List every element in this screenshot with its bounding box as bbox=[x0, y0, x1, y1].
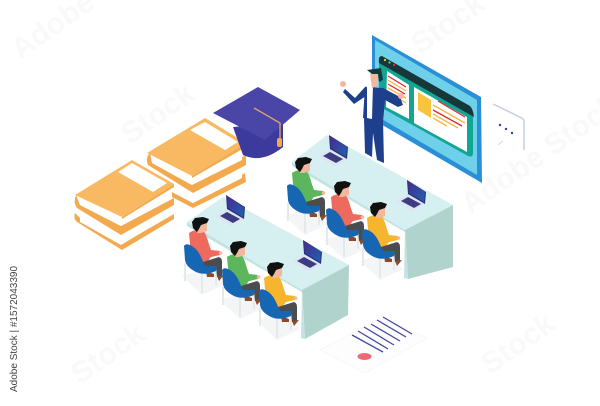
teacher bbox=[340, 68, 404, 163]
back table bbox=[292, 135, 453, 279]
front row laptops bbox=[215, 195, 322, 271]
certificate bbox=[320, 317, 427, 373]
watermark: Stock bbox=[115, 77, 201, 151]
back row students bbox=[285, 157, 403, 280]
side credit: Adobe Stock | #1572043390 bbox=[9, 266, 20, 392]
back row laptops bbox=[318, 135, 426, 211]
front row students bbox=[182, 217, 300, 340]
speech bubble bbox=[493, 104, 524, 150]
graduation cap bbox=[213, 87, 300, 158]
book stack: front bbox=[74, 160, 174, 250]
book stack: back bbox=[147, 118, 246, 208]
watermark: Stock bbox=[475, 307, 561, 381]
watermark: Stock bbox=[65, 317, 151, 391]
presentation screen bbox=[372, 35, 482, 183]
front table bbox=[187, 197, 349, 339]
